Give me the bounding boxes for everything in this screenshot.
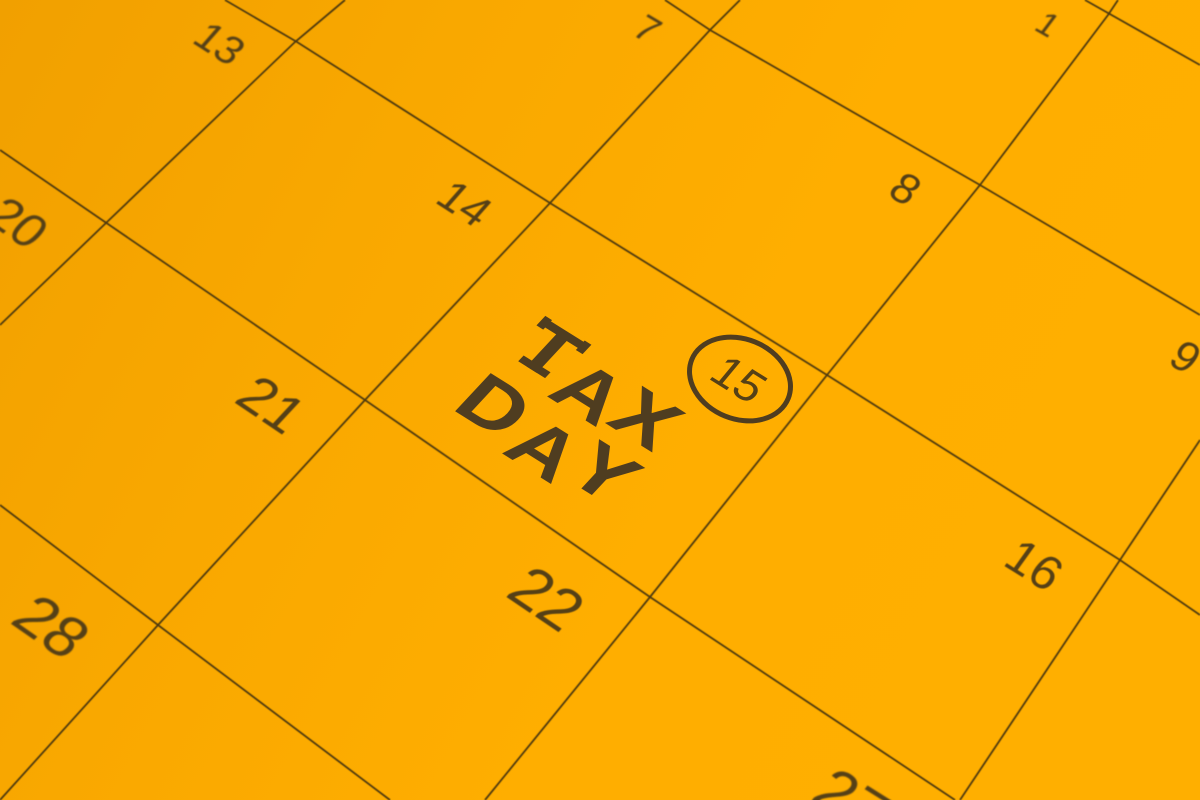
word: DAY: D — [439, 359, 549, 453]
circled date 15: 15 — [701, 345, 777, 413]
tax day stamp — [439, 307, 699, 519]
word: DAY: A — [489, 403, 599, 497]
word: DAY: Y — [551, 427, 657, 519]
date 1: 1 — [1028, 5, 1067, 45]
word: TAX — [498, 307, 699, 465]
word: DAY — [439, 359, 657, 519]
date 21: 21 — [224, 364, 319, 445]
word: TAX: A — [534, 346, 644, 440]
circled date 15 — [677, 322, 803, 436]
date 28: 28 — [0, 583, 103, 671]
date 14: 14 — [427, 171, 503, 236]
date 7: 7 — [625, 8, 669, 51]
date 13: 13 — [185, 13, 255, 74]
word: TAX: X — [593, 373, 699, 465]
date 16: 16 — [995, 529, 1073, 602]
date 22: 22 — [495, 554, 597, 644]
word: TAX: T — [498, 307, 600, 396]
date 8: 8 — [880, 163, 930, 215]
